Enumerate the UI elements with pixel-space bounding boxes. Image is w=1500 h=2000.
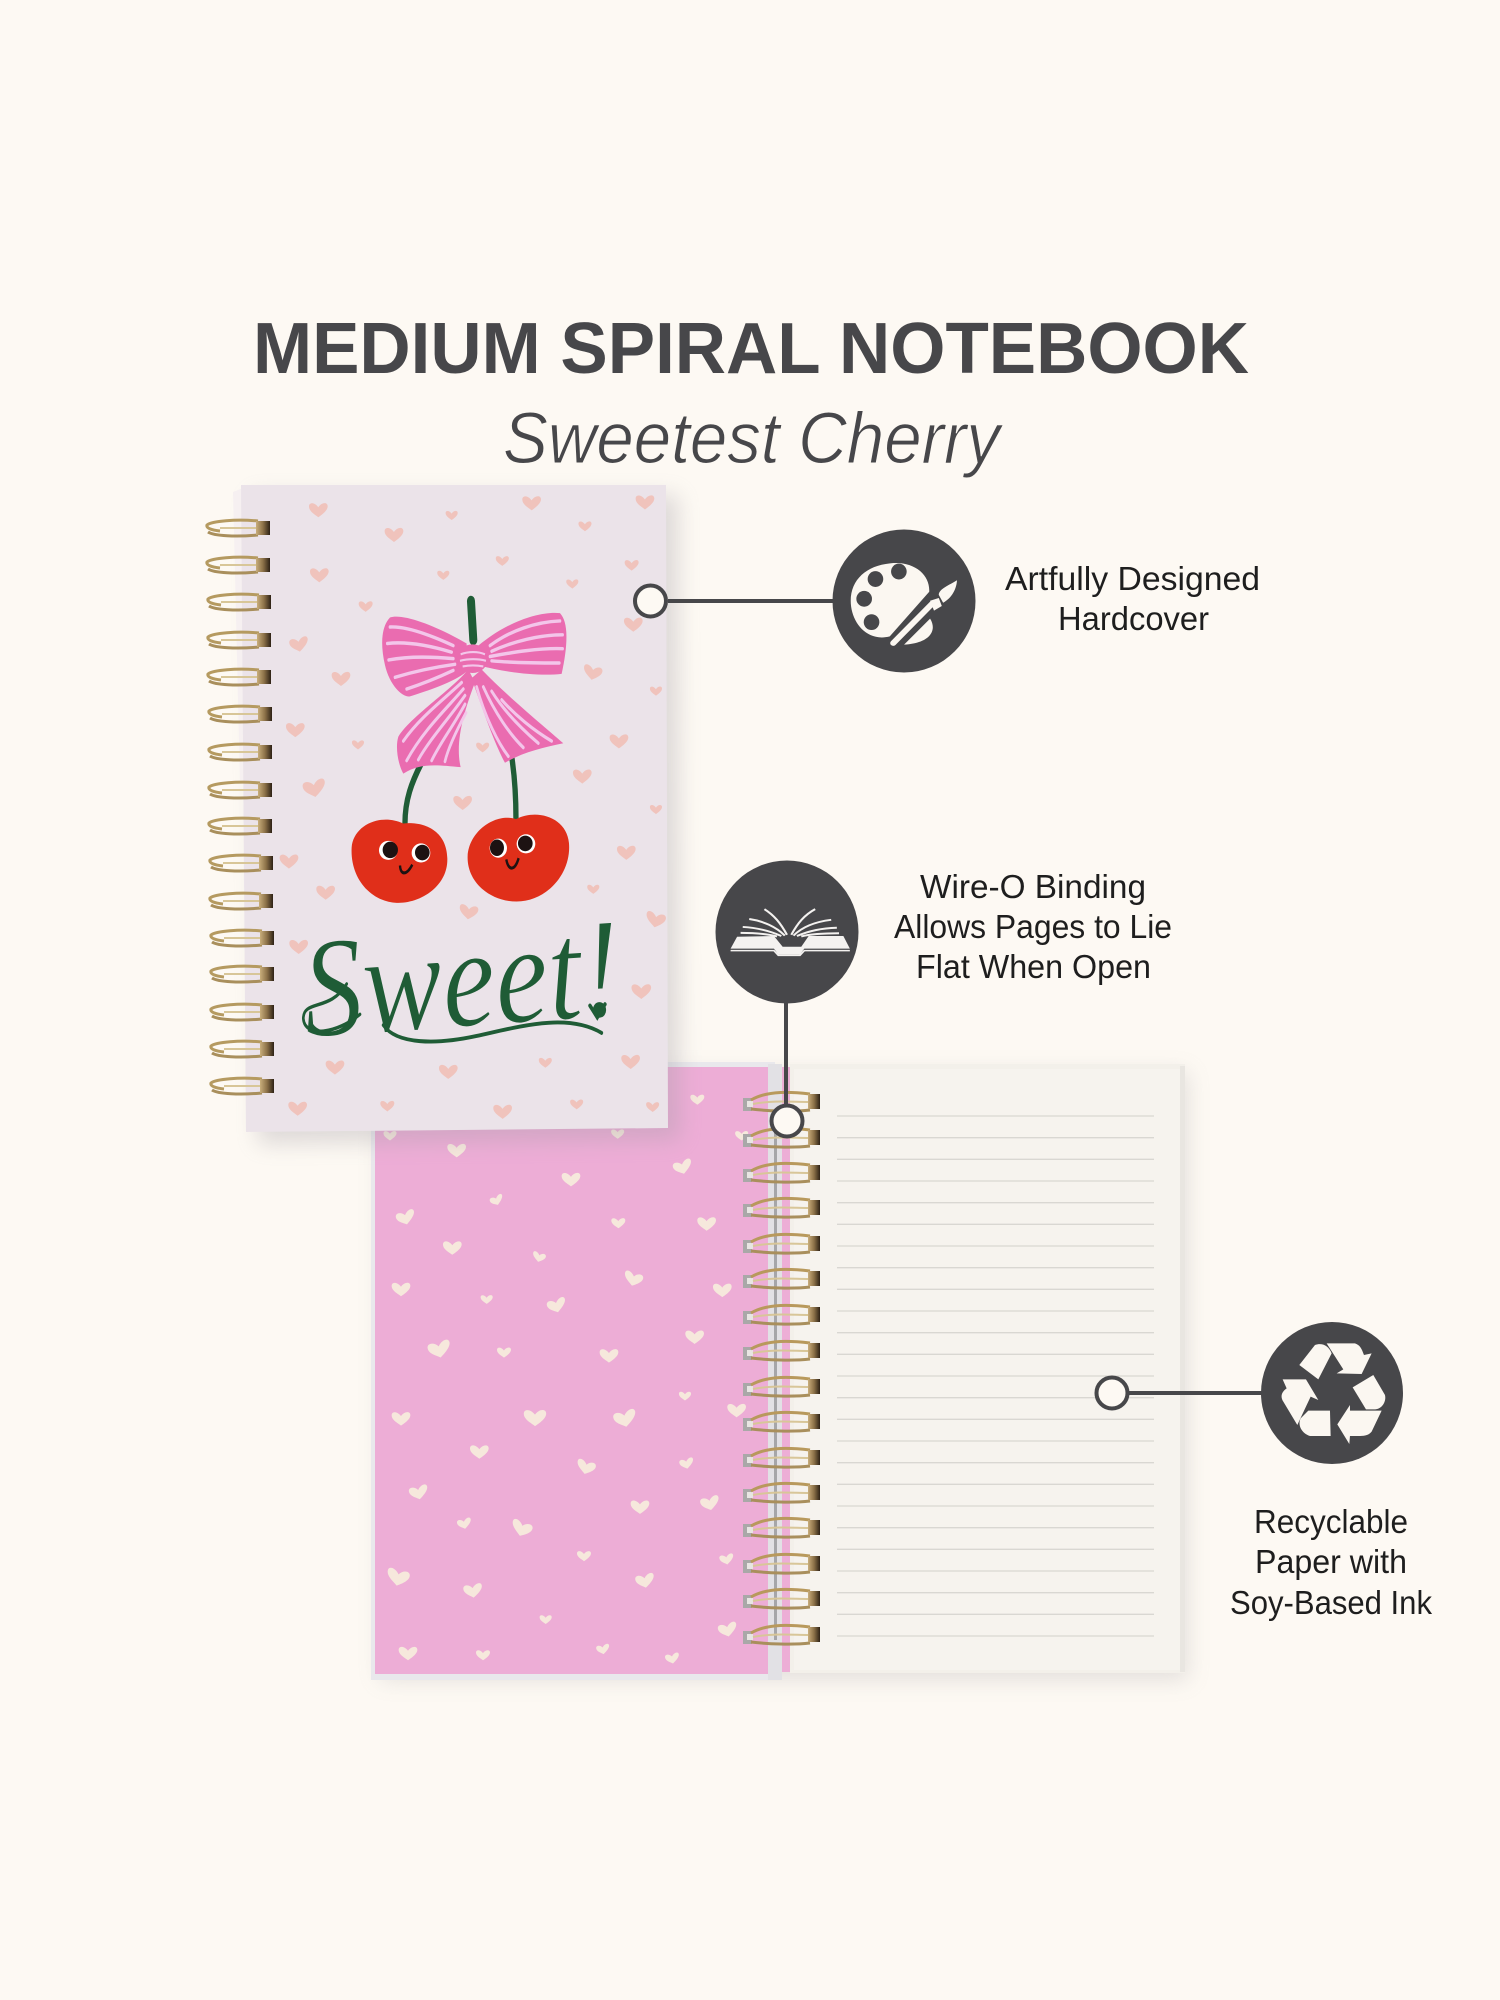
underline swash with heart <box>303 984 605 1042</box>
marker <box>635 586 666 616</box>
lined right page <box>790 1064 1185 1673</box>
cherry: left <box>352 820 447 903</box>
spine <box>768 1064 791 1680</box>
label <box>1005 560 1260 637</box>
cover board <box>241 485 668 1132</box>
icon: open book <box>716 860 858 1004</box>
pink inside cover with hearts <box>375 1067 770 1674</box>
label: Allows Pages to Lie <box>894 908 1172 945</box>
callout: hardcover <box>635 530 1260 672</box>
subtitle: Sweetest Cherry <box>503 399 1004 479</box>
lettering: Sweet!: Sweet! <box>297 888 626 1068</box>
label: Wire-O Binding <box>920 868 1146 905</box>
callout: wire-o binding <box>716 860 1172 1136</box>
paper edge <box>233 488 245 780</box>
stems <box>405 601 516 823</box>
wire-o binding rings <box>743 1092 820 1644</box>
label: Artfully Designed <box>1005 560 1260 597</box>
label: Paper with <box>1255 1543 1407 1580</box>
label: Recyclable <box>1254 1503 1408 1540</box>
title: MEDIUM SPIRAL NOTEBOOK <box>253 309 1249 389</box>
label: Soy-Based Ink <box>1230 1584 1432 1621</box>
label: Hardcover <box>1058 600 1209 637</box>
clear inside cover <box>371 1062 775 1680</box>
marker <box>772 1106 802 1136</box>
cover hearts <box>280 495 666 1119</box>
cherry: right <box>468 815 569 902</box>
icon: recycle <box>1261 1322 1403 1464</box>
icon: palette and brush <box>832 530 976 672</box>
label <box>1230 1503 1432 1621</box>
label <box>894 868 1172 985</box>
callout: recyclable paper <box>1096 1322 1432 1621</box>
illustration: cherries and bow <box>352 601 569 903</box>
marker <box>1096 1378 1128 1408</box>
label: Flat When Open <box>916 948 1151 985</box>
bow <box>382 613 566 774</box>
spiral rings <box>207 520 274 1094</box>
panel: open notebook <box>371 1062 1188 1680</box>
panel: closed notebook cover <box>207 485 680 1144</box>
